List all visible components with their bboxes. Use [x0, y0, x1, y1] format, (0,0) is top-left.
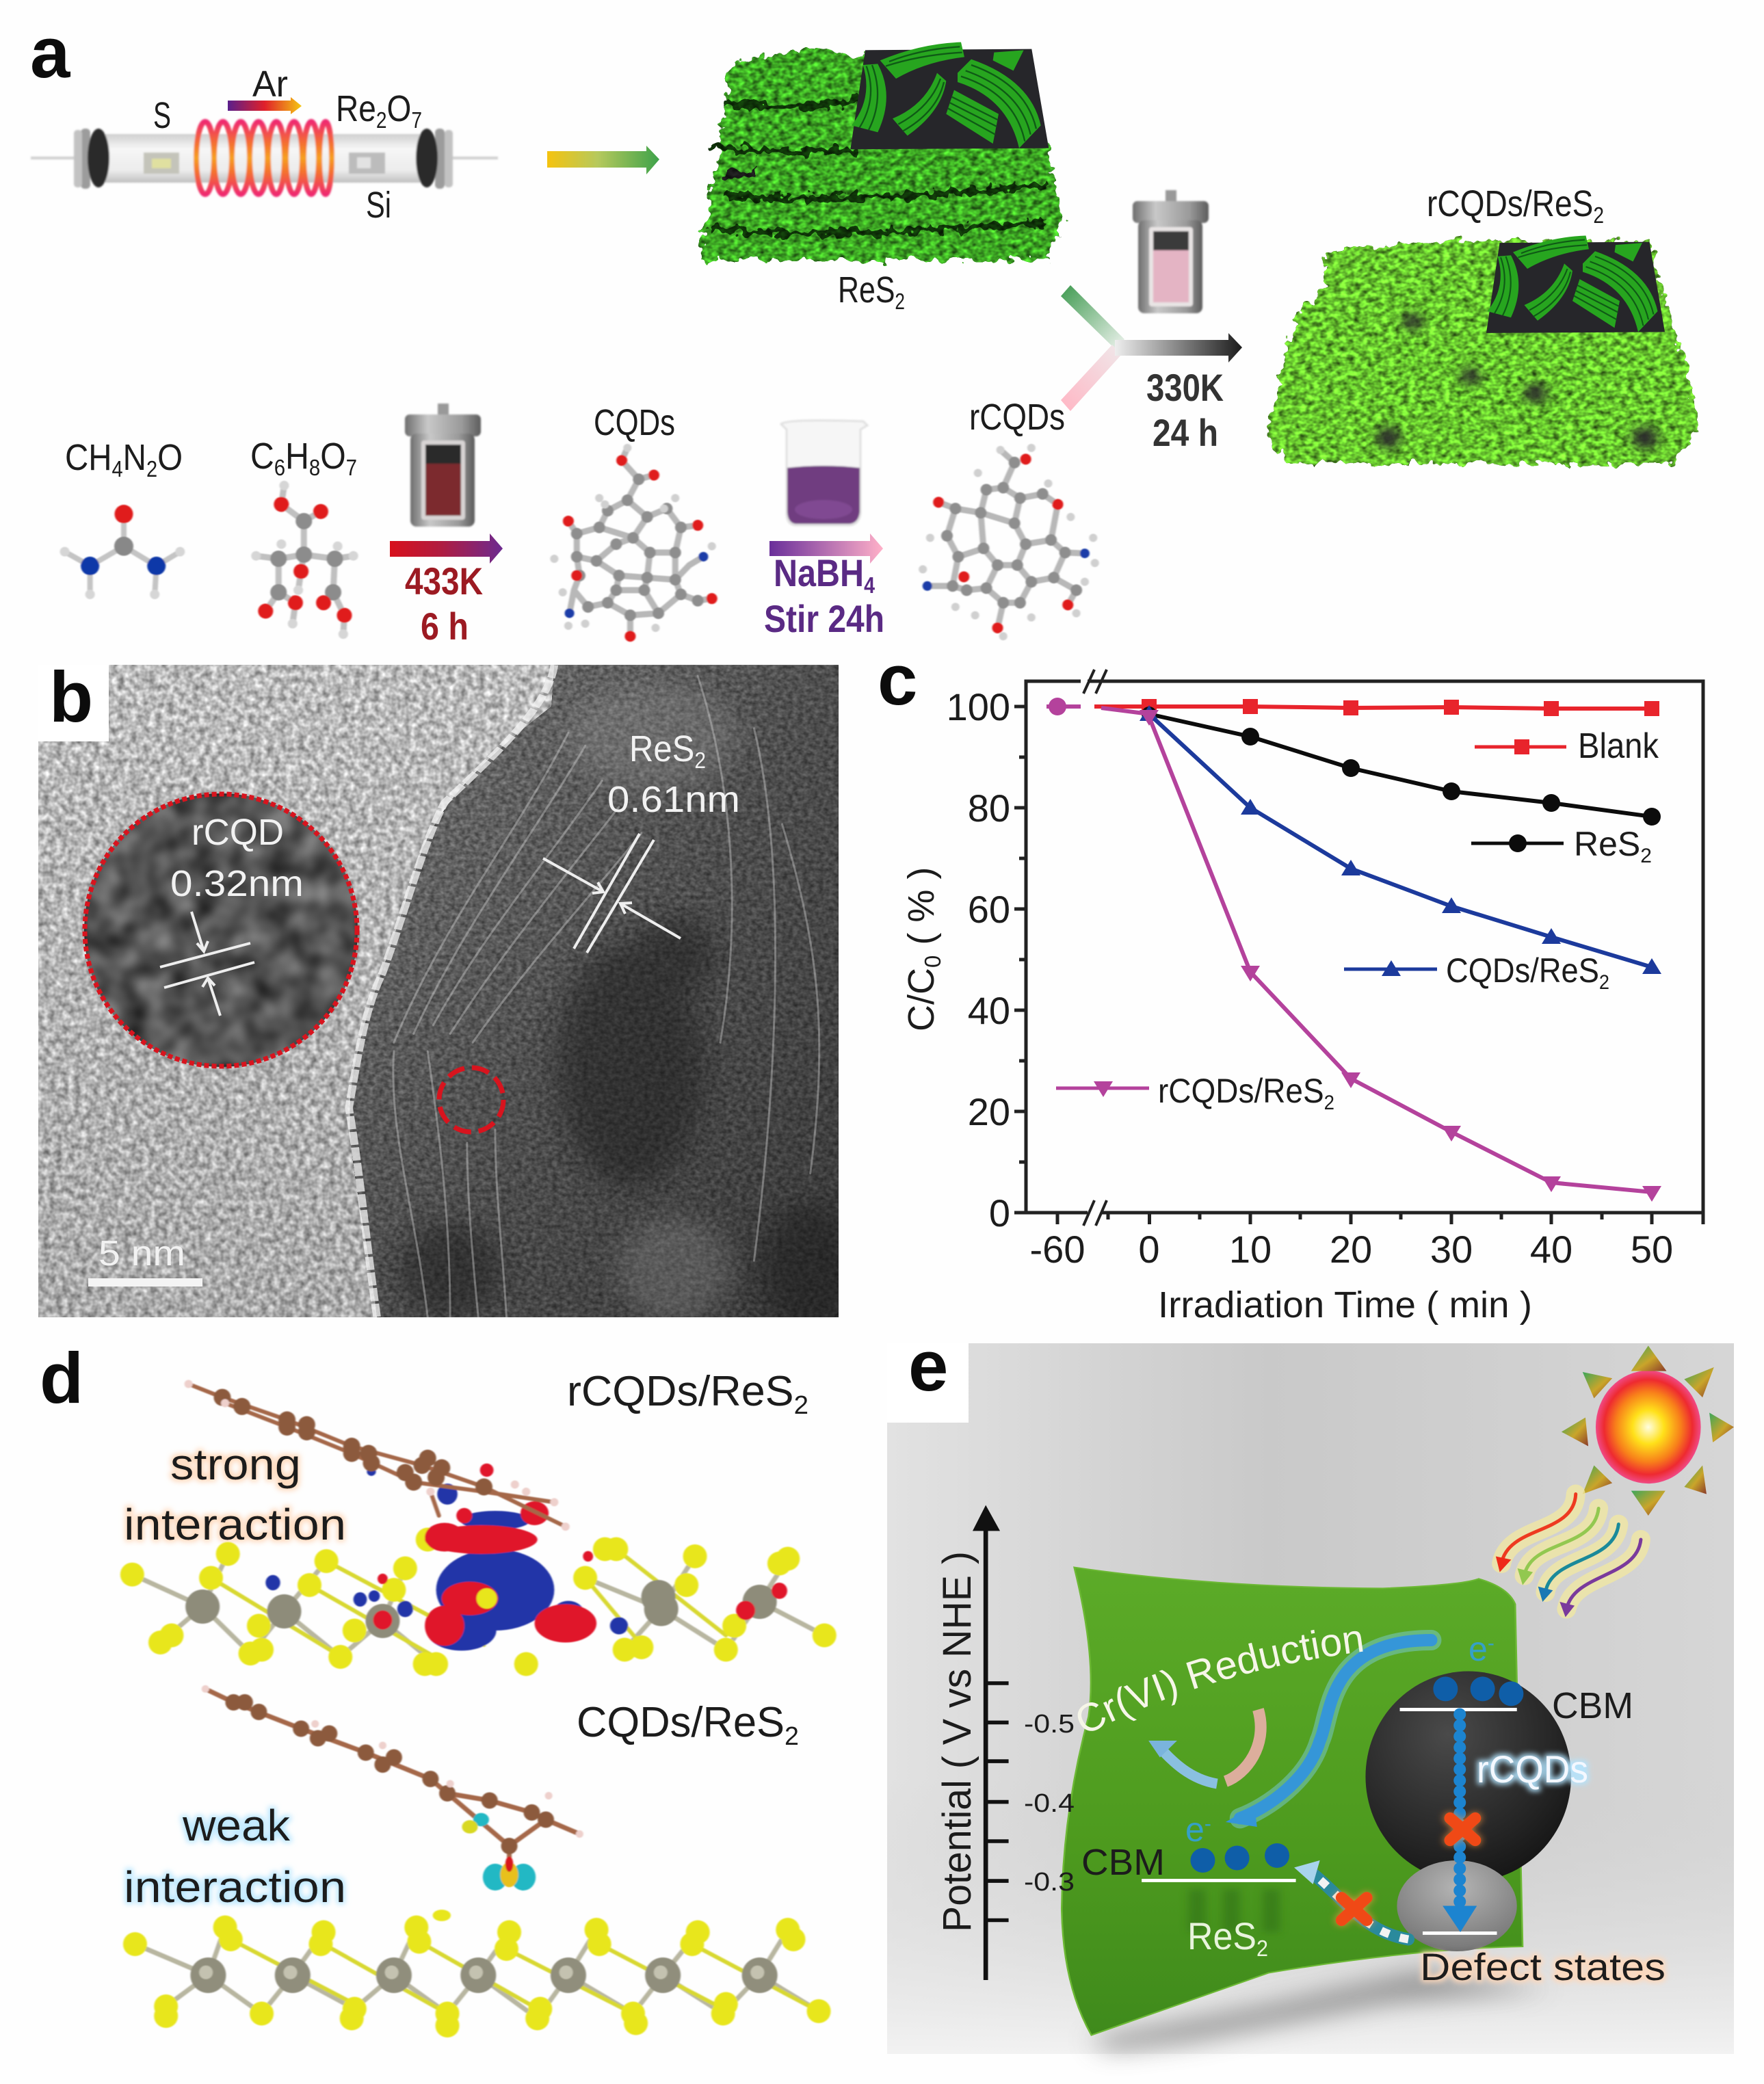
label ReS2: ReS — [838, 269, 910, 311]
label rCQDs/ReS2 model: rCQDs/ReS — [567, 1368, 791, 1415]
weak interaction label — [124, 1801, 346, 1912]
panel d: charge density models — [40, 1338, 824, 2026]
strong interaction label — [124, 1440, 346, 1549]
label CH4N2O: N — [123, 437, 146, 478]
text: rCQD: rCQD — [192, 812, 284, 853]
panel label b: b — [49, 657, 93, 737]
molecule: urea CH4N2O — [65, 514, 180, 594]
scene background — [887, 1343, 1734, 2054]
label CH4N2O: CH — [65, 437, 118, 478]
label S: S — [153, 95, 171, 136]
legend: CQDs/ReS2: 2 — [1599, 971, 1609, 994]
panel label a: a — [30, 13, 71, 93]
scale bar: 5 nm — [88, 1234, 202, 1287]
label rCQDs sphere: rCQDs — [1477, 1747, 1588, 1791]
rCQDs/ReS2 leaf mat — [1267, 236, 1698, 465]
label CH4N2O: 4 — [112, 456, 123, 482]
strong interaction label: strong — [170, 1440, 301, 1489]
arrow: 433K — [390, 533, 503, 564]
annotation: ReS2 lattice: 0.61nm — [607, 779, 740, 820]
y-axis tick labels: 100 — [947, 685, 1010, 728]
e- labels — [1185, 1630, 1495, 1849]
TEM micrograph background — [38, 665, 861, 1335]
series: ReS2 — [1142, 707, 1661, 826]
annotation: ReS2 lattice: 2 — [694, 748, 706, 773]
dotted arrow: defect to ReS2 — [1294, 1860, 1408, 1940]
strong interaction label: interaction — [124, 1500, 346, 1549]
electrons — [1202, 1689, 1511, 1860]
panel b: TEM image — [38, 657, 861, 1335]
label CBM rCQDs: CBM — [1552, 1685, 1633, 1726]
autoclave: red — [405, 404, 481, 527]
scale bar: 5 nm: 5 nm — [98, 1234, 185, 1274]
x-axis tick labels: 10 — [1229, 1228, 1272, 1271]
annotation: ReS2 lattice — [543, 728, 740, 953]
panel c: degradation chart — [878, 640, 1703, 1325]
y-axis tick labels: 80 — [968, 787, 1010, 830]
label ReS2 sheet: 2 — [1256, 1936, 1268, 1961]
legend: Blank: Blank — [1578, 726, 1659, 766]
label CQDs/ReS2 model: CQDs/ReS — [577, 1699, 787, 1746]
marker: red dashed circle — [439, 1068, 503, 1132]
e- labels: - — [1488, 1632, 1495, 1654]
legend: CQDs/ReS2 — [1344, 951, 1609, 994]
x-axis tick labels: 50 — [1631, 1228, 1673, 1271]
scene drawing in panel coordinates — [973, 1346, 1734, 2052]
series: CQDs/ReS2 — [1140, 705, 1661, 974]
x-axis title: Irradiation Time ( min ) — [1158, 1284, 1532, 1325]
e- labels: e — [1185, 1810, 1204, 1849]
text: 433K: 433K — [405, 559, 483, 603]
electron flow arrow — [1226, 1640, 1431, 1827]
axis tick labels: -0.5 — [1024, 1710, 1075, 1739]
sun rays — [1562, 1346, 1734, 1516]
text: NaBH4: NaBH — [774, 551, 878, 594]
text: 24 h: 24 h — [1153, 411, 1218, 454]
axis tick labels — [1024, 1710, 1075, 1897]
label Defect states: Defect states — [1420, 1945, 1666, 1988]
label CH4N2O: 2 — [146, 456, 157, 482]
legend: ReS2 — [1471, 825, 1652, 867]
label Re2O7: 7 — [411, 107, 422, 133]
label Ar: Ar — [252, 64, 288, 105]
arrow: NaBH4 — [769, 533, 883, 564]
arrow: potential axis — [973, 1505, 1009, 1980]
y-axis tick labels: 40 — [968, 989, 1010, 1032]
dotted arrow: rCQD level to defect — [1443, 1714, 1477, 1932]
annotation: ReS2 lattice: ReS — [629, 728, 701, 769]
axis tick labels: -0.4 — [1024, 1789, 1075, 1818]
gray defect sphere — [1397, 1860, 1517, 1951]
arrow: yellow to green — [547, 146, 659, 174]
x-axis tick labels: 30 — [1430, 1228, 1473, 1271]
y-axis title: ( % ) — [901, 867, 942, 955]
legend: rCQDs/ReS2: 2 — [1324, 1092, 1334, 1114]
panel label c: c — [878, 640, 917, 720]
x-axis tick labels: -60 — [1030, 1228, 1085, 1271]
ReS2 layer with charge density (strong) — [132, 1384, 824, 1664]
blocked marks — [1341, 1818, 1475, 1921]
y-axis tick labels: 20 — [968, 1090, 1010, 1133]
molecule: rCQD — [923, 448, 1095, 636]
weak interaction label: weak — [182, 1801, 291, 1850]
x-axis tick labels: 40 — [1530, 1228, 1572, 1271]
Y arrow: merge — [1061, 285, 1242, 411]
label rCQDs: rCQDs — [969, 397, 1065, 438]
dark streaks under ReS2 level — [1189, 1889, 1280, 1932]
white tab behind label b — [38, 665, 109, 741]
energy levels — [1142, 1710, 1517, 1933]
label C6H8O7: 6 — [274, 455, 285, 480]
legend: CQDs/ReS2: CQDs/ReS — [1446, 951, 1615, 990]
beaker — [781, 421, 867, 525]
label Si: Si — [366, 185, 391, 226]
molecule: citric acid C6H8O7 — [256, 486, 354, 634]
weak interaction label: interaction — [124, 1862, 346, 1912]
y-axis title: 0 — [920, 955, 945, 968]
panel e: charge transfer mechanism — [887, 1326, 1734, 2066]
label C6H8O7: 7 — [346, 455, 357, 480]
label rCQDs/ReS2: 2 — [1593, 202, 1604, 228]
y-axis title: C/C — [901, 968, 942, 1031]
panel a: synthesis schematic — [30, 13, 1698, 648]
label C6H8O7: O — [320, 436, 346, 477]
light rays — [1496, 1494, 1641, 1617]
y-axis tick labels — [947, 685, 1010, 1235]
label rCQDs/ReS2: rCQDs/ReS — [1427, 183, 1622, 224]
x-axis tick labels: 0 — [1138, 1228, 1160, 1271]
label ReS2: 2 — [895, 289, 905, 314]
label Re2O7: 2 — [376, 107, 387, 133]
label C6H8O7: 8 — [309, 455, 320, 480]
legend: Blank — [1475, 726, 1659, 766]
y-axis tick labels: 60 — [968, 888, 1010, 931]
panel label e: e — [908, 1326, 948, 1406]
label CQDs: CQDs — [594, 402, 675, 443]
arrow: Ar flow — [228, 97, 302, 114]
legend: rCQDs/ReS2: rCQDs/ReS — [1158, 1072, 1339, 1110]
legend: ReS2: 2 — [1640, 845, 1652, 867]
label CH4N2O: O — [157, 437, 183, 478]
y-axis title: Potential ( V vs NHE ) — [935, 1551, 979, 1932]
axis tick labels: -0.3 — [1024, 1868, 1075, 1897]
sun — [1596, 1371, 1701, 1483]
legend: rCQDs/ReS2 — [1056, 1072, 1334, 1114]
label CQDs/ReS2 model: 2 — [785, 1722, 799, 1751]
label C6H8O7: H — [285, 436, 309, 477]
label Re2O7: O — [387, 88, 411, 129]
label Re2O7: Re — [336, 88, 383, 129]
black rCQD sphere — [1365, 1672, 1571, 1882]
panel label d: d — [40, 1338, 83, 1419]
y-axis tick labels: 0 — [989, 1191, 1010, 1235]
x-axis tick labels — [1030, 1228, 1673, 1271]
floor shadow — [1092, 1970, 1549, 2052]
label rCQDs/ReS2 model: 2 — [794, 1391, 808, 1420]
text: 6 h: 6 h — [421, 605, 469, 648]
green sheet — [1062, 1568, 1523, 2035]
text: Stir 24h: Stir 24h — [764, 597, 884, 640]
molecule: CQD — [554, 448, 712, 636]
legend: ReS2: ReS — [1574, 825, 1640, 863]
curved text: Cr(VI) Reduction: Cr(VI) Reduction — [1078, 1629, 1363, 1731]
autoclave: pink — [1133, 190, 1209, 313]
white tab behind label e — [887, 1343, 969, 1423]
tube furnace — [31, 122, 498, 194]
label CBM ReS2: CBM — [1081, 1842, 1165, 1883]
e- labels: - — [1204, 1812, 1211, 1835]
label ReS2 sheet: ReS — [1187, 1914, 1262, 1957]
label C6H8O7: C — [250, 436, 277, 477]
series: Blank — [1094, 699, 1659, 716]
text: NaBH4: 4 — [864, 572, 876, 598]
series: rCQDs/ReS2 — [1046, 698, 1661, 1202]
text: 330K: 330K — [1146, 366, 1224, 409]
CQD molecule and ReS2 layer (weak) — [135, 1689, 819, 2026]
e- labels: e — [1469, 1630, 1488, 1668]
reduction cycle arrows — [1148, 1710, 1261, 1784]
inset: rCQD lattice: 0.32nm — [170, 863, 304, 904]
ReS2 leaf mat — [699, 42, 1064, 260]
chart axes — [1014, 670, 1703, 1226]
inset: rCQD lattice — [84, 793, 358, 1067]
x-axis tick labels: 20 — [1330, 1228, 1372, 1271]
